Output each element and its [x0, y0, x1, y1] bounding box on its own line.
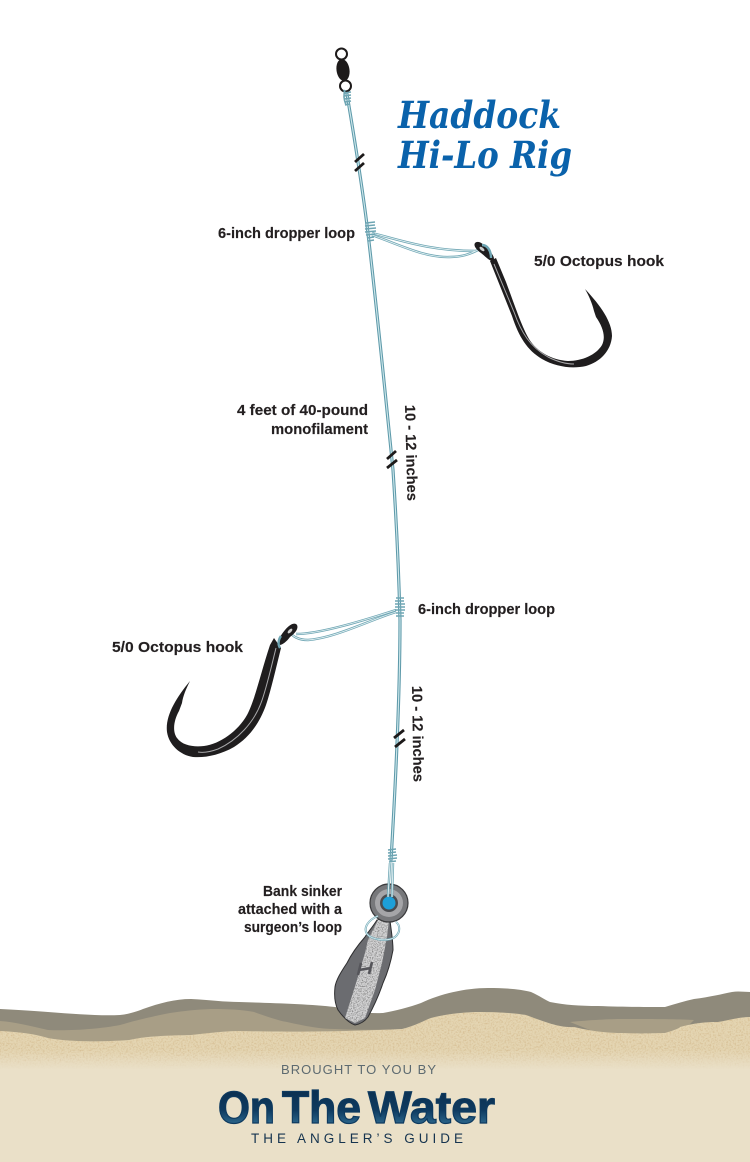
tan layer left [0, 1009, 402, 1050]
label: monofilament: 4 feet of 40-pound [237, 403, 368, 419]
line break mark middle [387, 451, 397, 468]
icon: barrel swivel [335, 48, 351, 92]
line break mark lower [394, 730, 405, 747]
lower dropper loop [290, 598, 405, 640]
label: upper length: 10 - 12 inches [401, 405, 420, 501]
logo: On The Water: On [218, 1082, 275, 1133]
line break mark top [355, 154, 364, 171]
tan layer right [570, 1019, 694, 1034]
label: bank sinker: attached with a [238, 902, 343, 918]
label: upper dropper loop: 6-inch dropper loop [218, 226, 355, 242]
title: Hi-Lo Rig [397, 133, 572, 177]
upper dropper loop [365, 222, 478, 257]
label: lower length: 10 - 12 inches [408, 686, 426, 782]
icon: lower octopus hook [167, 624, 297, 757]
lower line loop to sinker [366, 849, 399, 940]
title [397, 93, 572, 177]
sponsor line: BROUGHT TO YOU BY [281, 1062, 436, 1077]
label: bank sinker [238, 884, 343, 936]
sand layer [0, 1012, 750, 1075]
sinker light facet [345, 920, 389, 1023]
icon: upper octopus hook [474, 242, 612, 367]
sand fade [0, 1050, 750, 1070]
label: lower dropper loop: 6-inch dropper loop [418, 602, 555, 618]
sinker head [370, 884, 408, 922]
main monofilament line [347, 94, 400, 860]
sinker body [335, 920, 393, 1025]
label: lower hook: 5/0 Octopus hook [112, 640, 244, 656]
label: monofilament: monofilament [271, 422, 368, 438]
logo tagline: THE ANGLER’S GUIDE [251, 1131, 463, 1146]
title: Haddock [397, 93, 561, 137]
logo: On The Water [218, 1082, 495, 1133]
sinker H mark [358, 962, 372, 975]
label: bank sinker: surgeon’s loop [244, 920, 342, 936]
icon: bank sinker [335, 884, 408, 1030]
cream footer band [0, 1070, 750, 1162]
knot at swivel [344, 90, 351, 105]
grey mud layer [0, 988, 750, 1050]
blue eye [382, 896, 396, 910]
label: bank sinker: Bank sinker [263, 884, 342, 900]
seabed [0, 988, 750, 1162]
label: upper hook: 5/0 Octopus hook [534, 254, 665, 270]
logo: On The Water: Water [368, 1082, 495, 1133]
logo: On The Water: The [282, 1082, 361, 1133]
label: monofilament [237, 403, 368, 438]
